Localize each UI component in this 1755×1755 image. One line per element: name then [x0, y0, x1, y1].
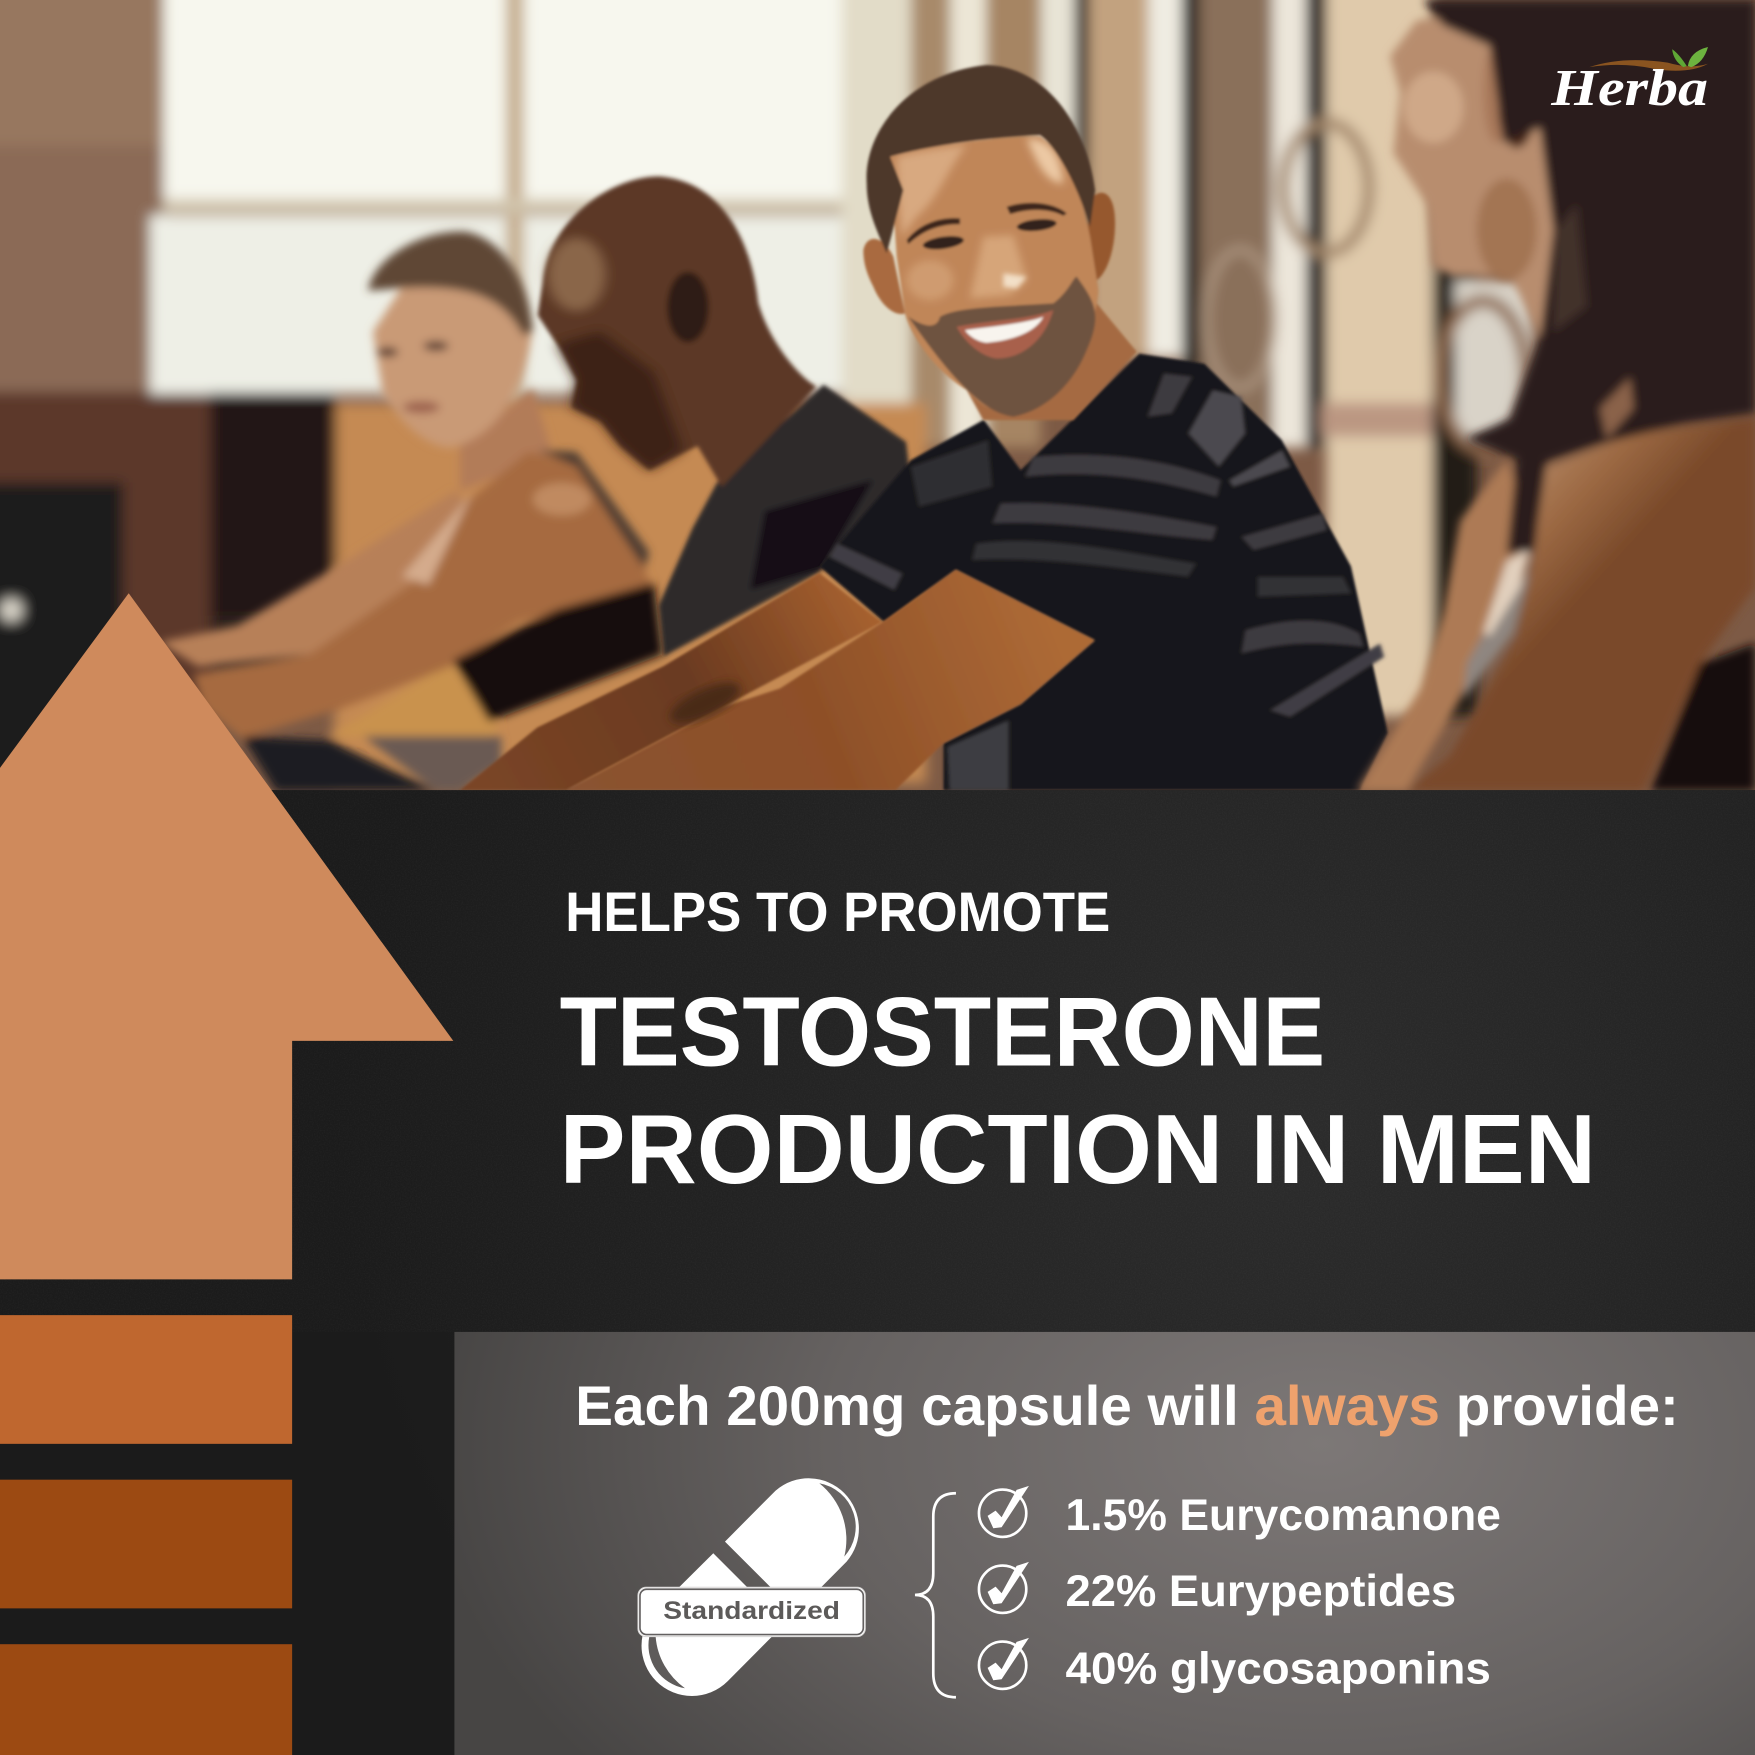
- man's mouth: [957, 310, 1053, 358]
- arrow stripe 3: [0, 1644, 292, 1755]
- main heading: [560, 977, 1596, 1204]
- item 2: 22% Eurypeptides: [1066, 1566, 1456, 1616]
- man's head: [863, 65, 1137, 420]
- icon: check 1: [979, 1486, 1029, 1537]
- woman's face and neck: [1390, 15, 1553, 337]
- man's neck: [967, 303, 1137, 420]
- photo: bald man in background: [538, 176, 910, 656]
- panel heading: Each 200mg capsule will always provide:: [575, 1374, 1679, 1437]
- dark panel background: [0, 790, 1755, 1755]
- photo: woman on the right: [1357, 0, 1755, 791]
- item 3: 40% glycosaponins: [1066, 1643, 1491, 1693]
- icon: capsule with Standardized label: Standardized: [663, 1597, 840, 1625]
- woman's hair: [1423, 0, 1755, 554]
- man's far arm: [460, 573, 882, 790]
- icon: check 3: [979, 1638, 1029, 1689]
- brace: [915, 1493, 956, 1697]
- man's eyes and brows: [922, 234, 965, 252]
- main heading: PRODUCTION IN MEN: [560, 1094, 1596, 1204]
- photo: smiling man centre: [460, 65, 1388, 790]
- woman's far arm: [1357, 459, 1533, 791]
- logo: Herba: [1550, 47, 1708, 117]
- woman's shoulder: [1407, 419, 1755, 791]
- item 1: 1.5% Eurycomanone: [1066, 1490, 1501, 1540]
- logo swoosh: [1589, 60, 1708, 71]
- man's hair: [866, 65, 1095, 253]
- photo: people smiling in gym: [0, 0, 1755, 839]
- subheading: HELPS TO PROMOTE: [565, 880, 1110, 943]
- icon: capsule with Standardized label: [638, 1478, 865, 1696]
- panel: capsule details: [454, 1332, 1755, 1755]
- man's t-shirt: [819, 354, 1388, 790]
- arrow stripe 1: [0, 1315, 292, 1444]
- photo background: gym windows and walls: [0, 0, 1533, 839]
- checklist: [979, 1486, 1501, 1693]
- man's face: [890, 137, 1098, 413]
- photo: woman in background: [160, 231, 663, 791]
- man's near arm: [566, 570, 1095, 790]
- logo leaves: [1672, 47, 1708, 67]
- icon: check 2: [979, 1562, 1029, 1613]
- man's beard: [908, 277, 1095, 417]
- arrow head and shaft: [0, 593, 453, 1279]
- logo wordmark: Herba: [1550, 60, 1708, 117]
- main heading: TESTOSTERONE: [560, 977, 1325, 1087]
- arrow stripe 2: [0, 1480, 292, 1608]
